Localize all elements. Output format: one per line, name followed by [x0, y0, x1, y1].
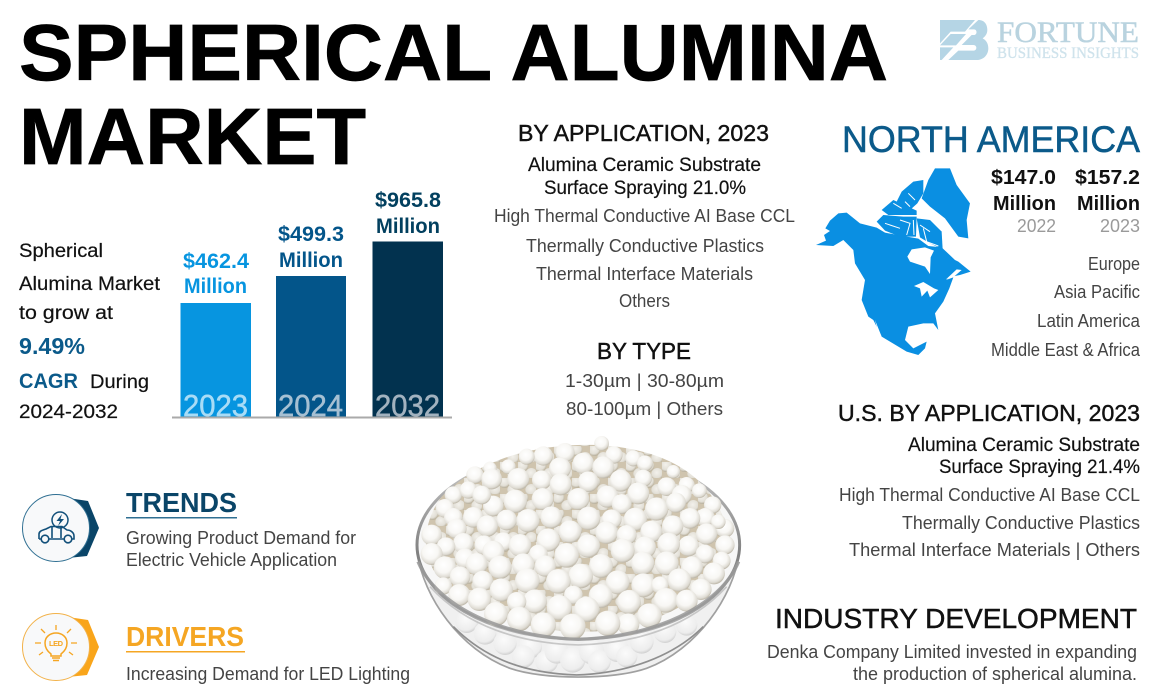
CAGR text block: Alumina Market	[19, 274, 161, 295]
panel: U.S. by application 2023: Thermally Conductive Plastics	[902, 513, 1140, 533]
drivers: Increasing Demand for LED Lighting	[126, 664, 410, 684]
title: SPHERICAL ALUMINA	[19, 8, 888, 97]
bar 2023: Million	[184, 275, 247, 298]
trends: Growing Product Demand for	[126, 528, 356, 548]
region list: Latin America	[1037, 311, 1141, 331]
bar 2024: Million	[279, 249, 343, 272]
panel: industry development: INDUSTRY DEVELOPMENT	[775, 603, 1137, 634]
panel: by application 2023: BY APPLICATION, 2023	[518, 120, 769, 146]
panel: by type: 80-100µm | Others	[566, 399, 723, 419]
stat: North America 2023: $157.2	[1075, 167, 1140, 189]
image: glass bowl of alumina spheres	[417, 436, 740, 677]
bar 2032: Million	[376, 215, 440, 238]
panel: industry development: Denka Company Limited invested in expanding	[767, 642, 1137, 662]
panel: U.S. by application 2023: U.S. BY APPLICATION, 2023	[838, 400, 1140, 426]
bar 2023	[180, 250, 251, 423]
stat: North America 2022: 2022	[1017, 216, 1056, 236]
bar 2032: 2032	[375, 388, 440, 423]
CAGR text block: to grow at	[19, 303, 114, 324]
panel: industry development: the production of spherical alumina.	[853, 664, 1137, 684]
bar 2032	[372, 189, 443, 423]
logo: Fortune Business Insights	[940, 16, 1139, 62]
heading: North America: NORTH AMERICA	[842, 119, 1140, 160]
stat: North America 2022: Million	[993, 193, 1056, 215]
region list	[991, 254, 1141, 360]
bar 2024	[276, 223, 346, 423]
stat: North America 2023: 2023	[1100, 216, 1140, 236]
panel: by application 2023: Others	[619, 291, 670, 311]
panel: U.S. by application 2023: Alumina Ceramic Substrate	[908, 435, 1140, 456]
CAGR text block	[19, 241, 161, 423]
panel: U.S. by application 2023: Surface Spraying 21.4%	[939, 457, 1140, 478]
stat: North America 2023: Million	[1077, 193, 1140, 215]
drivers: DRIVERS	[126, 621, 244, 652]
panel: by application 2023: Surface Spraying 21.0%	[544, 178, 746, 199]
map: North America	[816, 168, 971, 355]
panel: by application 2023: Thermal Interface Materials	[536, 264, 753, 284]
panel: industry development	[767, 603, 1137, 684]
CAGR text block: CAGR	[19, 370, 78, 393]
panel: by application 2023: High Thermal Conductive AI Base CCL	[494, 206, 795, 226]
panel: by type	[565, 338, 724, 419]
trends: TRENDS	[126, 487, 237, 518]
region list: Asia Pacific	[1054, 282, 1140, 302]
logo: Fortune Business Insights: BUSINESS INSIGHTS	[997, 45, 1139, 62]
bar chart	[172, 189, 452, 423]
bar 2032: $965.8	[375, 189, 441, 212]
bar 2024: $499.3	[278, 223, 344, 246]
region list: Middle East & Africa	[991, 340, 1141, 360]
panel: U.S. by application 2023	[838, 400, 1140, 560]
logo: Fortune Business Insights: FORTUNE	[997, 16, 1139, 49]
bar 2023: 2023	[183, 388, 248, 423]
panel: by application 2023	[494, 120, 795, 311]
icon: LED bulb badge	[22, 614, 99, 680]
panel: by type: 1-30µm | 30-80µm	[565, 371, 724, 391]
CAGR text block: 9.49%	[19, 333, 85, 359]
panel: by application 2023: Thermally Conductive Plastics	[526, 236, 764, 256]
panel: U.S. by application 2023: Thermal Interface Materials | Others	[849, 540, 1140, 560]
title: MARKET	[19, 92, 366, 181]
icon: electric car badge	[22, 494, 99, 562]
panel: by type: BY TYPE	[597, 338, 691, 364]
title	[19, 8, 888, 181]
stat: North America 2022	[991, 167, 1056, 236]
panel: by application 2023: Alumina Ceramic Substrate	[528, 155, 761, 176]
icon: LED bulb badge: LED	[49, 639, 64, 648]
CAGR text block: 2024-2032	[19, 402, 118, 423]
stat: North America 2023	[1075, 167, 1140, 236]
panel: U.S. by application 2023: High Thermal Conductive AI Base CCL	[839, 485, 1140, 505]
drivers	[126, 621, 410, 684]
bar 2024: 2024	[278, 388, 343, 423]
CAGR text block: Spherical	[19, 241, 103, 262]
trends: Electric Vehicle Application	[126, 550, 337, 570]
stat: North America 2022: $147.0	[991, 167, 1056, 189]
bar 2023: $462.4	[183, 250, 249, 273]
region list: Europe	[1088, 254, 1140, 274]
CAGR text block: During	[90, 372, 149, 393]
trends	[126, 487, 356, 570]
